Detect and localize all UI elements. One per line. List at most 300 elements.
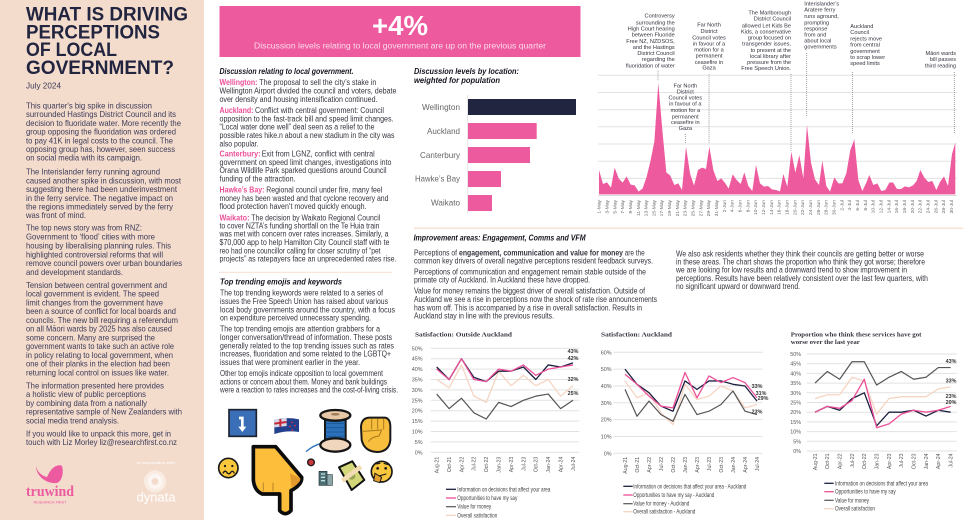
text block: contact: If you would like to unpack this more, get in (26, 429, 171, 438)
bar: Auckland: Auckland (427, 127, 460, 136)
line chart: proportion who think services got worse (790, 331, 957, 513)
text block: getting worse: we are looking for low results and a downward trend to show improvement in (675, 266, 907, 275)
line chart: Satisfaction Outside Auckland: Apr-24 (558, 457, 564, 472)
date: July 2024 (26, 82, 61, 90)
text block: drivers: Perceptions of (414, 248, 458, 257)
line chart: Satisfaction Auckland: Oct-21 (635, 457, 641, 473)
line chart: Satisfaction Auckland: Oct-23 (719, 457, 725, 473)
line chart: proportion who think services got worse: 23% (946, 394, 957, 400)
line chart: Satisfaction Outside Auckland: Jan-23 (496, 457, 502, 473)
line chart: proportion who think services got worse: 50% (790, 352, 801, 358)
annotation: Marlborough library: The Marlborough (748, 10, 791, 16)
text block: other emojis: were a reaction to rates increases and the cost-of-living crisis. (219, 386, 398, 395)
text block: keywords: The top trending keywords were related to a series of (220, 289, 384, 298)
line chart: Satisfaction Auckland: Jul-24 (755, 457, 761, 471)
text block: ferry: caused another spike in discussion, with most (26, 176, 182, 185)
date axis labels: 30-Jul (949, 200, 955, 213)
line chart: proportion who think services got worse: 43% (946, 359, 957, 365)
annotation: Marlborough library: District Council (754, 17, 791, 23)
date axis labels: 4-Jun (730, 200, 736, 212)
text block: Auckland: also popular. (220, 139, 258, 148)
line chart: Satisfaction Auckland: 29% (758, 396, 769, 402)
line chart: Satisfaction Outside Auckland (412, 331, 579, 519)
line chart: Satisfaction Outside Auckland: Aug-21 (434, 457, 440, 473)
annotation: Far North ceasefire (lower): motion for a (671, 108, 701, 114)
date axis labels: 28-Jul (941, 200, 947, 213)
chart title (791, 331, 922, 346)
date axis labels: 14-Jun (769, 200, 775, 215)
line chart: Satisfaction Outside Auckland: Jul-23 (521, 457, 527, 471)
legend: Value for money (457, 504, 492, 511)
annotation: fluoride hearing: fluoridation of water (626, 63, 675, 69)
text block: drivers: Auckland stay in line with the previous results. (414, 312, 554, 321)
line chart: Satisfaction Auckland: Aug-21 (623, 457, 629, 474)
annotation: Interislander ferry: runs aground, (804, 14, 839, 20)
text block: other emojis (219, 369, 398, 395)
text block: getting worse: perceptions. Results have been relatively consistent over the last few quarters, with (676, 274, 928, 283)
logo: dynata: in association with (137, 461, 175, 465)
text block: drivers: engagement, communication and value for money (459, 248, 623, 257)
text block: Auckland: Conflict with central government: Council (255, 106, 384, 115)
date axis labels: 11-May (636, 199, 642, 216)
annotation: Interislander ferry: about local (804, 39, 831, 45)
line chart: Satisfaction Auckland: 50% (601, 367, 612, 373)
line chart: Satisfaction Auckland: Jan-23 (683, 457, 689, 473)
date axis labels: 3-May (604, 199, 610, 214)
title: WHAT IS DRIVING (26, 4, 188, 26)
text block: contact (26, 429, 177, 447)
line chart: Satisfaction Outside Auckland: 50% (412, 346, 423, 352)
line chart: Satisfaction Auckland: 23% (752, 410, 763, 416)
legend: Overall satisfaction (835, 506, 875, 513)
line chart: proportion who think services got worse: 25% (790, 400, 801, 406)
text block: information sources: a holistic view of public perceptions (26, 390, 146, 399)
legend (623, 483, 747, 516)
text block: ferry: suggesting there had been underinvestment (26, 185, 178, 194)
line chart: Satisfaction Outside Auckland: 30% (412, 388, 423, 394)
text block: Waikato (219, 213, 396, 264)
annotation: Marlborough library: group focused on (748, 36, 791, 42)
text block: Hawke's Bay: Hawke’s Bay: (220, 186, 264, 195)
annotation: Marlborough library: allowed Let Kids Be (742, 23, 791, 29)
legend: Value for money - Auckland (633, 501, 690, 508)
text block: Hawke's Bay: money has been wasted and that cyclone recovery and (220, 194, 388, 203)
date axis labels: 25-May (691, 199, 697, 216)
line chart: Satisfaction Auckland: Jul-22 (659, 457, 665, 471)
line chart: Satisfaction Auckland: Jan-24 (731, 457, 737, 473)
date axis labels: 24-Jun (808, 200, 814, 215)
annotation: Far North ceasefire (upper): in favour of a (693, 41, 726, 47)
line chart: Satisfaction Auckland: 33% (752, 384, 763, 390)
text block: Hawke's Bay (220, 186, 388, 211)
annotation: Far North ceasefire (lower): Gaza (679, 126, 693, 132)
line chart: Satisfaction Auckland: 20% (601, 418, 612, 424)
heading: weighted for population (414, 76, 500, 85)
line chart: Satisfaction Outside Auckland: Oct-23 (534, 457, 540, 472)
line chart: Satisfaction Outside Auckland: Apr-22 (459, 457, 465, 472)
line chart: Satisfaction Outside Auckland: 43% (568, 349, 579, 355)
line chart: Satisfaction Auckland: Apr-24 (743, 457, 749, 473)
text block: ferry (25, 168, 182, 220)
legend: Opportunities to have my say - Auckland (633, 492, 715, 499)
line chart: proportion who think services got worse: 10% (790, 430, 801, 436)
bar: Canterbury (420, 147, 530, 163)
text block: drivers (414, 248, 657, 321)
text block: drivers: Auckland we see a rise in perceptions now the shock of rate rise announcements (414, 295, 657, 304)
text block: Canterbury: funding of the attraction. (220, 174, 296, 183)
text block: Waikato: projects” as ratepayers face an unprecedented rates rise. (220, 255, 396, 264)
legend (824, 480, 928, 513)
text block: ferry: was front of mind. (25, 211, 86, 220)
annotation: fluoride hearing (626, 14, 675, 81)
annotation: Māori wards: Māori wards (926, 51, 956, 57)
line chart: proportion who think services got worse: 45% (790, 362, 801, 368)
line chart: Satisfaction Auckland: 40% (601, 384, 612, 390)
text block: ferry: The Interislander ferry running aground (26, 168, 160, 177)
text block: central tension: limit changes from the government have (26, 298, 163, 307)
logo: dynata (136, 461, 176, 504)
icon: down arrow square (229, 410, 256, 436)
line chart: Satisfaction Outside Auckland: 10% (412, 430, 423, 436)
line chart: proportion who think services got worse: Jan-24 (924, 453, 930, 469)
text block: getting worse: in these areas. The chart shows the proportion who think they got worse; therefore (676, 258, 925, 267)
line chart: proportion who think services got worse: 15% (790, 420, 801, 426)
callout: +4% banner: Discussion levels relating to local government are up on the previous quarter (254, 41, 546, 51)
text block: central tension: one of their planks in the election had been (26, 360, 170, 369)
annotation: fluoride hearing: between Fluoride (632, 33, 675, 39)
line chart: proportion who think services got worse: Aug-21 (813, 453, 819, 470)
date axis labels: 18-Jun (784, 200, 790, 215)
annotation: fluoride hearing: surrounding the (636, 20, 675, 26)
line chart: proportion who think services got worse: Jul-23 (899, 453, 905, 468)
text block: keywords (220, 289, 395, 323)
text block: central tension: councils. The new bill requiring a referendum (26, 316, 178, 325)
line chart: proportion who think services got worse: 5% (793, 439, 801, 445)
date axis labels: 12-Jun (761, 200, 767, 215)
line chart: Satisfaction Outside Auckland: Oct-21 (447, 457, 453, 472)
text block: Wellington (220, 78, 397, 104)
text block: drivers: are the (625, 248, 645, 257)
date axis labels: 12-Jul (878, 200, 884, 213)
text block: central tension: government wants to take such an active role (26, 342, 174, 351)
title (26, 4, 188, 79)
line chart: Satisfaction Auckland (601, 331, 769, 516)
line chart: proportion who think services got worse: Oct-22 (862, 453, 868, 469)
heading: Discussion relating to local government. (220, 67, 354, 76)
text block: fluoridation spike: surrounded Hastings District Council and its (26, 110, 176, 119)
text block: news story: and development standards. (26, 268, 123, 277)
text block: fluoridation spike: decision to fluoridate water. More recently the (26, 119, 181, 128)
legend: Information on decisions that affect your area (835, 480, 928, 487)
text block: Waikato: Waikato: (220, 213, 250, 222)
date axis labels: 26-Jun (816, 200, 822, 215)
text block: contact: touch with Liz Morley liz@researchfirst.co.nz (26, 438, 177, 447)
annotation: speed limits: speed limits (850, 61, 880, 67)
panel: top trending emojis and keywords (219, 278, 398, 514)
legend: Opportunities to have my say (457, 495, 518, 502)
annotation: Marlborough library: to present at the (751, 48, 791, 54)
line chart: Satisfaction Outside Auckland: 45% (412, 357, 423, 363)
text block: Wellington: Wellington Airport divided the council and voters, debate (220, 86, 397, 96)
text block: Hawke's Bay: Regional council under fire, many feel (266, 186, 382, 195)
bar: Wellington: Wellington (422, 103, 460, 112)
annotation: Interislander ferry: Interislander’s (804, 2, 839, 8)
chart title: worse over the last year (791, 339, 860, 346)
annotation: speed limits: from central (850, 43, 880, 49)
annotation: Interislander ferry: response (804, 26, 827, 32)
text block: information sources: representative sample of New Zealanders with (26, 408, 182, 416)
date axis labels: 29-May (706, 199, 712, 216)
date axis labels: 18-Jul (902, 200, 908, 213)
text block: information sources: by combining data from a nationally (26, 399, 148, 408)
text block: news story: highlighted controversial reforms that will (26, 250, 163, 259)
annotation: Marlborough library: local library after (750, 54, 791, 60)
bar: Auckland (427, 123, 537, 139)
legend: Value for money (835, 497, 870, 504)
legend: Opportunities to have my say (835, 489, 896, 496)
annotation: Marlborough library: transgender issues, (742, 42, 791, 48)
text block: central tension: in policy relating to local government, when (26, 351, 173, 360)
annotation: Far North ceasefire (lower): Council votes (669, 96, 702, 102)
date axis labels: 24-Jul (926, 200, 932, 213)
icon: red badge (308, 459, 314, 466)
annotation: speed limits: Auckland (850, 24, 873, 30)
text block: Waikato: reo had one councillor calling for closer scrutiny of “pet (220, 246, 381, 255)
annotation: speed limits (850, 24, 885, 134)
text block: fluoridation spike (26, 102, 181, 163)
panel: improvement areas (414, 234, 928, 321)
text block: news story: The top news story was from RNZ: (26, 224, 142, 233)
date axis labels: 17-May (659, 199, 665, 216)
date axis labels: 8-Jul (863, 200, 869, 211)
annotation: Marlborough library: pressure from the (747, 60, 791, 66)
text block: Wellington: Wellington: (220, 78, 258, 87)
date axis labels: 2-Jun (722, 200, 728, 212)
annotation: Far North ceasefire (upper) (692, 23, 726, 143)
text block: information sources: The information presented here provides (26, 381, 164, 390)
text block: Canterbury: Exit from LGNZ, conflict with central (262, 150, 375, 159)
line chart: proportion who think services got worse: Oct-23 (911, 453, 917, 469)
text block: Auckland: Auckland: (220, 106, 254, 115)
text block: central tension: on all Māori wards by 2025 has also caused (26, 325, 172, 334)
line chart: Satisfaction Outside Auckland: 32% (568, 377, 579, 383)
date axis labels: 10-Jul (871, 200, 877, 213)
heading: Top trending emojis and keywords (220, 278, 342, 287)
text block: Waikato: The decision by Waikato Regional Council (251, 213, 380, 222)
date axis labels: 7-May (620, 199, 626, 214)
text block: fluoridation spike: group opposing the fluoridation was ordered (26, 128, 176, 137)
date axis labels: 16-Jun (777, 200, 783, 215)
logo: truwind (26, 465, 74, 504)
panel: left summary sidebar (0, 0, 204, 520)
annotation: fluoride hearing: and the Hastings (633, 45, 675, 51)
date axis labels: 8-Jun (745, 200, 751, 212)
chart: daily discussion area timeline (597, 2, 957, 216)
icon: bank building (319, 471, 332, 485)
bar: Waikato: Waikato (431, 198, 460, 208)
annotation: Far North ceasefire (lower): Far North (673, 84, 697, 90)
chart title: Proportion who think these services have got (791, 331, 922, 338)
annotation: fluoride hearing: District Council (637, 51, 675, 57)
line chart: proportion who think services got worse: Oct-21 (825, 453, 831, 469)
annotation: Far North ceasefire (lower): permanent (672, 114, 699, 120)
date axis labels: 14-Jul (886, 200, 892, 213)
line chart: Satisfaction Outside Auckland: 20% (412, 409, 423, 415)
text block: keywords: issues the Free Speech Union has raised about various (220, 297, 388, 306)
title: GOVERNMENT? (26, 57, 174, 79)
date axis labels: 6-Jun (738, 200, 744, 212)
line chart: Satisfaction Outside Auckland: 0% (415, 450, 423, 456)
bar: Hawke's Bay (415, 171, 501, 187)
line chart: Satisfaction Outside Auckland: 15% (412, 419, 423, 425)
text block: keywords: local body governments around the country, with a focus (220, 305, 395, 314)
legend: Overall satisfaction (457, 512, 498, 519)
text block: emojis: issues that were prominent earlier in the year. (220, 358, 360, 367)
date axis labels: 27-May (698, 199, 704, 216)
logo: truwind: RESEARCH FIRST (34, 500, 67, 504)
text block: emojis: The top trending emojis are attention grabbers for a (220, 325, 380, 334)
annotation: Marlborough library: Kids, a conservative (741, 29, 791, 35)
annotation: Marlborough library (741, 10, 791, 151)
text block: getting worse: We also ask residents whether they think their councils are getting better or worse (676, 249, 924, 258)
text block: drivers: Value for money remains the biggest driver of overall satisfaction. Outside of (414, 287, 646, 296)
date axis labels: 20-Jul (910, 200, 916, 213)
annotation: fluoride hearing: Controversy (645, 14, 675, 20)
line chart: proportion who think services got worse: 30% (790, 391, 801, 397)
line chart: proportion who think services got worse: 40% (790, 371, 801, 377)
text block: other emojis: actions or concern about them. Money and bank buildings (220, 377, 387, 386)
text block: other emojis: Other top emojis indicate opposition to local government (220, 369, 384, 378)
text block: Waikato: was met with concern over rates increases. Similarly, a (219, 230, 389, 239)
line chart: Satisfaction Outside Auckland: 25% (568, 391, 579, 397)
line chart: Satisfaction Outside Auckland: 35% (412, 378, 423, 384)
annotation: Far North ceasefire (upper): motion for a (694, 48, 725, 54)
icon: pointing down hand (253, 447, 302, 514)
icon: thinking face (371, 461, 392, 483)
text block: emojis: increases, fluoridation and some related to the LGBTQ+ (220, 350, 391, 359)
text block: central tension: Tension between central government and (26, 281, 167, 290)
annotation: Interislander ferry: Aratere ferry (804, 8, 836, 14)
text block: fluoridation spike: opposing group has, however, seen success (26, 145, 175, 154)
text block: drivers: common key drivers of overall negative perceptions resident feedback surveys. (414, 256, 653, 265)
text block: Canterbury: Orana Wildlife Park sparked questions around Council (220, 166, 387, 175)
bar chart (415, 95, 576, 214)
annotation: Interislander ferry: governments (804, 45, 837, 51)
date axis labels (597, 199, 955, 216)
text block: news story (26, 224, 182, 277)
date axis labels: 23-May (683, 199, 689, 216)
legend: Overall satisfaction - Auckland (633, 509, 696, 516)
line chart: Satisfaction Outside Auckland: Oct-22 (484, 457, 490, 472)
logo: truwind: truwind (26, 484, 74, 500)
line chart: Satisfaction Outside Auckland: Apr-23 (509, 457, 515, 472)
annotation: Far North ceasefire (lower): District (677, 90, 694, 96)
annotation: fluoride hearing: Free NZ, NZDSOS, (626, 39, 675, 45)
text block: drivers: primate city of Auckland. In Auckland these have dropped. (414, 276, 590, 285)
annotation: speed limits: rejects move (850, 36, 882, 42)
annotation: Interislander ferry: prompting (804, 20, 829, 26)
text block: Hawke's Bay: flood protection haven’t moved quickly enough. (220, 202, 366, 211)
line chart: Satisfaction Auckland: 0% (604, 451, 612, 457)
chart title: Satisfaction: Auckland (601, 331, 672, 338)
text block: news story: Government to ‘flood’ cities with more (26, 233, 155, 242)
text block: emojis: longer conversation/thread of information. These posts (220, 333, 392, 342)
text block: getting worse: no significant upward or downward trend. (676, 282, 800, 291)
annotation: fluoride hearing: High Court hearing (628, 26, 675, 32)
text block: Auckland: possible rates hike.n about a new stadium in the city was (220, 131, 394, 140)
annotation: Interislander ferry: from and (804, 32, 826, 38)
line chart: Satisfaction Auckland: Apr-23 (695, 457, 701, 473)
bar: Canterbury: Canterbury (420, 151, 461, 160)
date axis labels: 1-May (597, 199, 603, 214)
line chart: proportion who think services got worse: Jan-23 (874, 453, 880, 469)
bar: Wellington (422, 99, 576, 115)
panel: discussion relating to local government (219, 67, 397, 264)
annotation: Far North ceasefire (upper): Gaza (702, 66, 717, 72)
annotation: speed limits: Council (850, 30, 869, 36)
annotation: Far North ceasefire (upper): ceasefire in (695, 60, 723, 66)
text block: fluoridation spike: to pay 41K in legal costs to the council. The (26, 136, 173, 145)
callout: +4% banner: +4% (372, 10, 428, 41)
date axis labels: 19-May (667, 199, 673, 216)
line chart: Satisfaction Outside Auckland: 25% (412, 398, 423, 404)
text block: keywords: on expenditure perceived unnecessary spending. (220, 314, 371, 323)
text block: fluoridation spike: This quarter's big spike in discussion (26, 102, 152, 110)
text block: central tension (26, 281, 178, 377)
date axis labels: 2-Jul (839, 200, 845, 211)
line chart: Satisfaction Outside Auckland: Jul-22 (472, 457, 478, 471)
line chart: proportion who think services got worse: 20% (790, 410, 801, 416)
annotation: Far North ceasefire (lower) (669, 84, 702, 143)
icon: spool of thread (306, 410, 350, 452)
annotation: Māori wards: bill passes (930, 57, 956, 63)
annotation: speed limits: to scrap lower (850, 55, 885, 61)
bar: Hawke's Bay: Hawke’s Bay (415, 174, 461, 184)
line chart: Satisfaction Auckland: Jul-23 (707, 457, 713, 471)
line chart: proportion who think services got worse: 0% (793, 449, 801, 455)
text block: fluoridation spike: on social media with its campaign. (26, 154, 142, 163)
annotation: Marlborough library: Free Speech Union. (741, 66, 791, 72)
text block: Waikato: $70,000 app to help Hamilton City Council staff with te (220, 238, 390, 247)
date axis labels: 21-May (675, 199, 681, 216)
line chart: Satisfaction Auckland: 30% (601, 401, 612, 407)
date axis labels: 31-May (714, 199, 720, 216)
text block: central tension: been a source of conflict for local boards and (26, 307, 176, 316)
text block: emojis: generally related to the top trending issues such as rates (220, 341, 394, 350)
line chart: proportion who think services got worse: 20% (946, 400, 957, 406)
text block: drivers: has worn off. This is accompanied by a rise in overall satisfaction. Results in (414, 303, 642, 312)
heading (414, 67, 519, 85)
text block: central tension: returning local control on issues like water. (26, 368, 169, 377)
date axis labels: 13-May (644, 199, 650, 216)
line chart: proportion who think services got worse: 35% (790, 381, 801, 387)
text block: Canterbury: Canterbury: (220, 150, 260, 159)
annotation: Far North ceasefire (upper): permanent (696, 54, 723, 60)
annotation: Far North ceasefire (upper): Far North (697, 23, 721, 29)
bar: Waikato (431, 195, 492, 211)
date axis labels: 15-May (651, 199, 657, 216)
icon: money with bandage (339, 461, 364, 490)
date axis labels: 4-Jul (847, 200, 853, 211)
text block: information sources: social media trend analysis. (26, 416, 119, 425)
text block: getting worse (675, 249, 928, 291)
chart title: Satisfaction: Outside Auckland (415, 331, 512, 338)
date axis labels: 28-Jun (824, 200, 830, 215)
line chart: Satisfaction Outside Auckland: 5% (415, 440, 423, 446)
date axis labels: 10-Jun (753, 200, 759, 215)
title: PERCEPTIONS (26, 21, 160, 43)
date axis labels: 20-Jun (792, 200, 798, 215)
